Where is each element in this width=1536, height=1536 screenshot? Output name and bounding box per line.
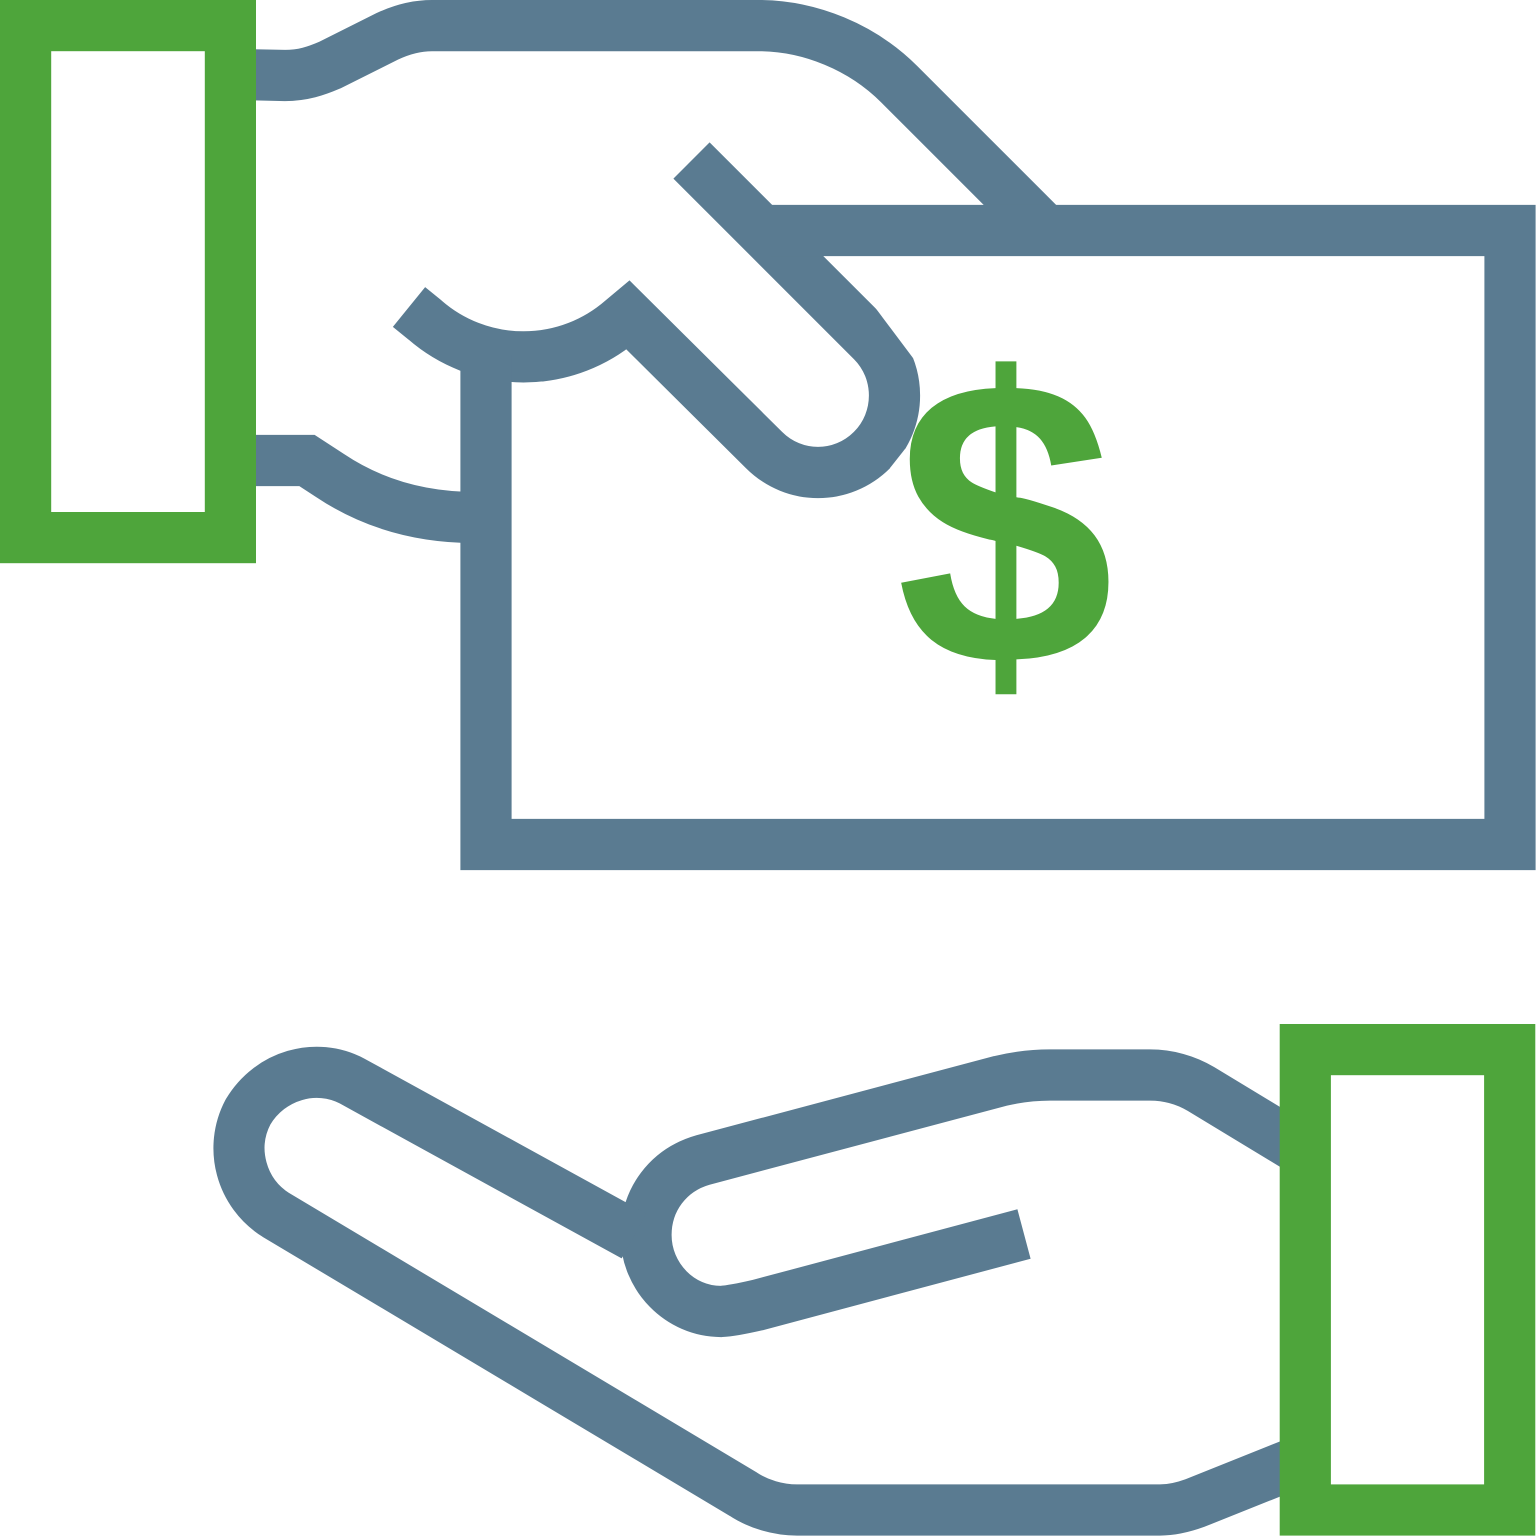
icon: lower hand outline: [239, 1072, 1295, 1510]
icon: upper hand cuff: [26, 26, 230, 538]
icon: dollar sign: $: [896, 295, 1114, 751]
icon: upper hand outline: [240, 26, 1045, 517]
icon: lower hand cuff: [1305, 1050, 1510, 1510]
icon: banknote frame: [486, 230, 1510, 844]
